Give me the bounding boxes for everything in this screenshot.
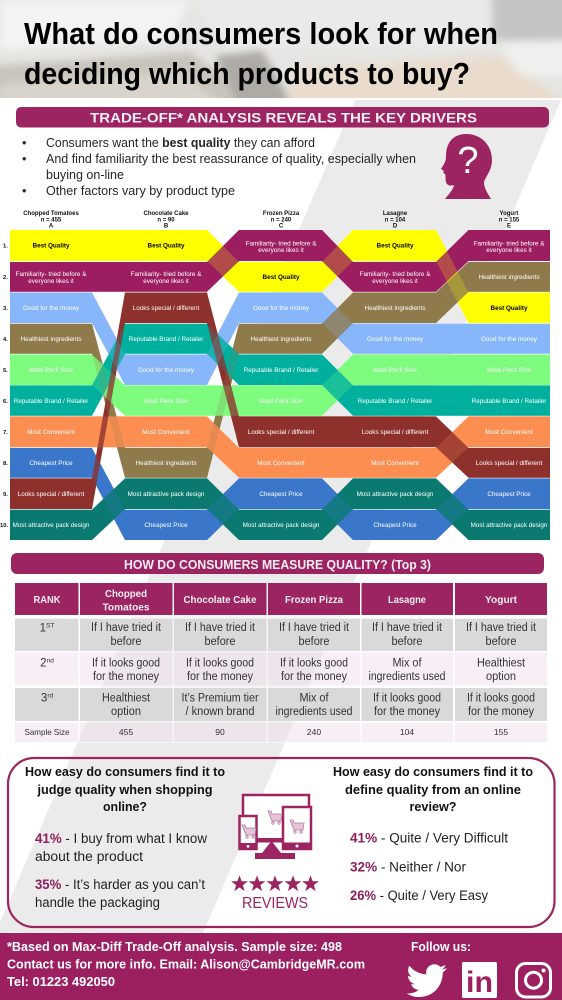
table row: sample size: Sample Size: [24, 727, 70, 737]
labels: column B: Reputable Brand / Retailer: [129, 336, 203, 343]
column headings: n = 455: [41, 218, 62, 224]
column headings: Frozen Pizza: [263, 211, 300, 217]
icon: twitter: [406, 964, 447, 997]
title: What do consumers look for when: [24, 17, 498, 51]
right answers: [350, 830, 508, 903]
table row: 3rd: ingredients used: [276, 706, 352, 718]
labels: column E: Best Quality: [490, 305, 528, 312]
table row: 3rd: 3: [41, 693, 47, 705]
table row: 1st: before: [110, 636, 142, 648]
band: cheapest price: [10, 448, 550, 540]
labels: column E: Familiarity- tried before &: [474, 240, 545, 248]
table row: 3rd: If it looks good: [467, 693, 535, 705]
icon: linkedin: [462, 962, 497, 999]
left answers: [35, 831, 207, 910]
left question: online?: [103, 800, 147, 814]
table row: 3rd: It’s Premium tier: [182, 693, 259, 705]
table row: sample size: [15, 722, 547, 742]
icon: five stars: [231, 875, 319, 891]
footer band: [0, 933, 562, 1000]
labels: column C: Healthiest ingredients: [250, 336, 312, 343]
labels: column C: [243, 240, 320, 529]
table row: sample size: 240: [307, 727, 321, 737]
labels: column B: Best Quality: [147, 243, 185, 250]
labels: column B: Most attractive pack design: [128, 491, 205, 498]
table row: 1st: If I have tried it: [91, 622, 162, 634]
left question: How easy do consumers find it to: [25, 765, 225, 779]
labels: column D: Healthiest ingredients: [364, 305, 426, 312]
icon: devices with shopping carts: [239, 795, 312, 859]
labels: column D: Reputable Brand / Retailer: [358, 398, 432, 405]
table row: 3rd: rd: [47, 693, 53, 700]
labels: column C: everyone likes it: [258, 247, 304, 254]
labels: column B: Ideal Pack Size: [144, 398, 188, 405]
table row: 3rd: If it looks good: [373, 693, 441, 705]
footer notes: [7, 940, 365, 989]
table row: 2nd: for the money: [281, 671, 347, 683]
column headings: Lasagne: [383, 211, 408, 217]
labels: column B: [128, 243, 205, 529]
labels: column C: Familiarity- tried before &: [246, 240, 317, 248]
band: most convenient: [10, 416, 550, 478]
labels: column C: Best Quality: [262, 274, 300, 281]
table header row: Chopped: [105, 588, 147, 600]
column headings: E: [507, 224, 511, 230]
table row: 2nd: nd: [47, 658, 54, 665]
table row: 1st: before: [392, 636, 422, 648]
labels: column A: everyone likes it: [28, 278, 74, 285]
labels: column C: Looks special / different: [248, 429, 314, 436]
column headings: n = 155: [499, 218, 520, 224]
labels: column D: Most Convenient: [371, 460, 419, 467]
left answers: about the product: [35, 849, 143, 864]
panel: online quality: [8, 758, 554, 927]
labels: column D: [357, 243, 434, 529]
rank numbers: 3.: [3, 306, 8, 312]
right question: define quality from an online: [345, 783, 521, 797]
labels: column A: Familiarity- tried before &: [16, 271, 87, 278]
icon: instagram: [516, 964, 550, 997]
bullet list: Consumers want the best quality they can afford: [46, 136, 315, 150]
table row: 2nd: Healthiest: [477, 658, 526, 670]
table row: 3rd: Healthiest: [102, 693, 151, 705]
labels: column E: Most Convenient: [485, 429, 533, 436]
left question: judge quality when shopping: [36, 783, 212, 797]
labels: column E: Cheapest Price: [487, 491, 531, 498]
labels: column E: everyone likes it: [486, 247, 532, 254]
table row: 1st: If I have tried it: [279, 622, 350, 634]
table row: 2nd: 2: [40, 658, 47, 670]
table row: 3rd: / known brand: [186, 706, 254, 718]
left answers: 41% - I buy from what I know: [35, 831, 207, 846]
rank numbers: 7.: [3, 430, 8, 436]
table row: 1st: If I have tried it: [466, 622, 537, 634]
labels: column E: Most attractive pack design: [471, 522, 548, 529]
labels: column E: Good for the money: [481, 336, 538, 343]
band: familiarity: [10, 230, 550, 292]
column headings: Chocolate Cake: [143, 211, 189, 217]
table row: 2nd: If it looks good: [186, 658, 254, 670]
table row: sample size: 155: [494, 727, 508, 737]
column headings: A: [49, 224, 54, 230]
reviews label: REVIEWS: [242, 895, 308, 912]
table row: 1st: before: [204, 636, 236, 648]
heading: how do consumers measure quality: [11, 553, 544, 574]
table header row: [15, 583, 547, 615]
bullet list: •: [22, 152, 26, 166]
icon: head with question mark: ?: [457, 140, 479, 182]
right question: review?: [410, 800, 456, 814]
table row: 2nd: option: [486, 671, 516, 683]
labels: column A: Most Convenient: [27, 429, 75, 436]
table row: 2nd: for the money: [187, 671, 253, 683]
table row: 1st: If I have tried it: [372, 622, 443, 634]
follow us label: Follow us:: [411, 940, 471, 954]
footer notes: *Based on Max-Diff Trade-Off analysis. Sample size: 498: [7, 940, 342, 954]
labels: column C: Cheapest Price: [259, 491, 303, 498]
column headings: [23, 211, 520, 230]
labels: column E: Reputable Brand / Retailer: [472, 398, 546, 405]
labels: column B: everyone likes it: [143, 278, 189, 285]
labels: column A: Looks special / different: [18, 491, 84, 498]
left answers: handle the packaging: [35, 895, 160, 910]
icon: linkedin: in: [466, 966, 493, 999]
heading: trade-off analysis: [16, 107, 549, 128]
bullet list: [22, 136, 416, 198]
table row: 3rd: for the money: [374, 706, 440, 718]
labels: column A: Most attractive pack design: [13, 522, 90, 529]
labels: column D: Most attractive pack design: [357, 491, 434, 498]
band: ideal pack size: [10, 354, 550, 416]
rank numbers: 1.: [3, 244, 8, 250]
labels: column E: Looks special / different: [476, 460, 542, 467]
chart: trade-off rank flow: [0, 211, 550, 540]
heading: trade-off analysis: TRADE-OFF* ANALYSIS REVEALS THE KEY DRIVERS: [90, 110, 477, 126]
left answers: 35% - It’s harder as you can’t: [35, 877, 205, 892]
labels: column D: Familiarity- tried before &: [360, 271, 431, 278]
table row: 3rd: [15, 688, 547, 721]
labels: column D: Looks special / different: [362, 429, 428, 436]
bullet list: •: [22, 184, 26, 198]
rank numbers: 5.: [3, 368, 8, 374]
band labels: [13, 240, 548, 529]
table row: 2nd: ingredients used: [368, 671, 446, 683]
column headings: C: [279, 224, 284, 230]
rank numbers: 8.: [3, 461, 8, 467]
right question: How easy do consumers find it to: [333, 765, 533, 779]
right question: [333, 765, 533, 814]
band: looks special: [10, 292, 550, 509]
rank numbers: 10.: [0, 523, 8, 529]
table header row: Chocolate Cake: [184, 594, 257, 606]
table row: 2nd: [15, 652, 547, 686]
labels: column B: Healthiest ingredients: [135, 460, 197, 467]
labels: column A: Best Quality: [32, 243, 70, 250]
labels: column B: Cheapest Price: [144, 522, 188, 529]
right answers: 32% - Neither / Nor: [350, 860, 466, 874]
right answers: 41% - Quite / Very Difficult: [350, 830, 508, 846]
labels: column C: Ideal Pack Size: [259, 398, 303, 405]
table row: 3rd: for the money: [468, 706, 534, 718]
bullet list: Other factors vary by product type: [46, 184, 235, 198]
labels: column B: Familiarity- tried before &: [131, 271, 202, 278]
bullet list: •: [22, 136, 26, 150]
labels: column C: Reputable Brand / Retailer: [244, 367, 318, 374]
bullet list: buying on-line: [46, 168, 124, 182]
table row: 1st: If I have tried it: [185, 622, 256, 634]
footer notes: Contact us for more info. Email: Alison@CambridgeMR.com: [7, 958, 365, 972]
table row: 1st: ST: [46, 622, 54, 630]
labels: column E: Healthiest ingredients: [478, 274, 540, 281]
band: best quality: [10, 230, 550, 323]
labels: column A: Ideal Pack Size: [29, 367, 73, 374]
labels: column D: Ideal Pack Size: [373, 367, 417, 374]
column headings: Yogurt: [500, 211, 518, 217]
table row: 1st: 1: [40, 622, 46, 634]
table header row: Lasagne: [388, 594, 426, 606]
labels: column A: Cheapest Price: [29, 460, 73, 467]
table header row: Tomatoes: [102, 602, 150, 614]
rank numbers: 2.: [3, 275, 8, 281]
labels: column E: [471, 240, 548, 529]
column headings: D: [393, 224, 398, 230]
labels: column E: Ideal Pack Size: [487, 367, 531, 374]
band: healthiest ingredients: [10, 262, 550, 478]
labels: column D: Good for the money: [367, 336, 424, 343]
icon: head with question mark: [441, 134, 492, 199]
header photo background: [0, 0, 562, 98]
labels: column A: Reputable Brand / Retailer: [14, 398, 88, 405]
table header row: RANK: [34, 594, 61, 606]
rank numbers: 6.: [3, 399, 8, 405]
table row: 2nd: for the money: [93, 671, 159, 683]
band: good for the money: [10, 292, 550, 385]
labels: column C: Most attractive pack design: [243, 522, 320, 529]
table row: sample size: 90: [215, 727, 225, 737]
table: quality measures: [15, 582, 547, 743]
table row: sample size: 104: [400, 727, 414, 737]
labels: column D: Best Quality: [376, 243, 414, 250]
table row: 3rd: Mix of: [300, 693, 329, 705]
table row: 1st: [15, 619, 547, 651]
footer notes: Tel: 01223 492050: [7, 975, 115, 989]
table row: sample size: 455: [119, 727, 133, 737]
labels: column B: Looks special / different: [133, 305, 199, 312]
table row: 2nd: If it looks good: [280, 658, 348, 670]
table row: 2nd: If it looks good: [92, 658, 160, 670]
rank numbers: [0, 244, 8, 529]
column headings: n = 104: [385, 218, 406, 224]
right answers: 26% - Quite / Very Easy: [350, 888, 488, 903]
table row: 1st: before: [298, 636, 330, 648]
band: reputable brand: [10, 324, 550, 416]
labels: column C: Good for the money: [253, 305, 310, 312]
heading: how do consumers measure quality: HOW DO CONSUMERS MEASURE QUALITY? (Top 3): [124, 558, 431, 572]
table header row: Yogurt: [485, 594, 517, 606]
labels: column D: Cheapest Price: [373, 522, 417, 529]
table row: 2nd: Mix of: [392, 658, 422, 670]
labels: column A: Good for the money: [23, 305, 80, 312]
labels: column B: Good for the money: [138, 367, 195, 374]
labels: column A: [13, 243, 90, 529]
bullet list: And find familiarity the best reassurance of quality, especially when: [46, 152, 416, 166]
column headings: n = 240: [271, 218, 292, 224]
labels: column C: Most Convenient: [257, 460, 305, 467]
column headings: Chopped Tomatoes: [23, 211, 79, 217]
table row: 1st: before: [486, 636, 516, 648]
rank numbers: 4.: [3, 337, 8, 343]
labels: column A: Healthiest ingredients: [20, 336, 82, 343]
left question: [25, 765, 225, 814]
labels: column B: Most Convenient: [142, 429, 190, 436]
table header row: Frozen Pizza: [285, 594, 343, 606]
column headings: n = 90: [157, 218, 175, 224]
table row: 3rd: option: [111, 706, 141, 718]
title: [24, 17, 498, 91]
title: deciding which products to buy?: [24, 57, 470, 91]
rank numbers: 9.: [3, 492, 8, 498]
column headings: B: [164, 224, 169, 230]
flow bands: [10, 230, 550, 540]
labels: column D: everyone likes it: [372, 278, 418, 285]
band: most attractive pack design: [10, 478, 550, 540]
